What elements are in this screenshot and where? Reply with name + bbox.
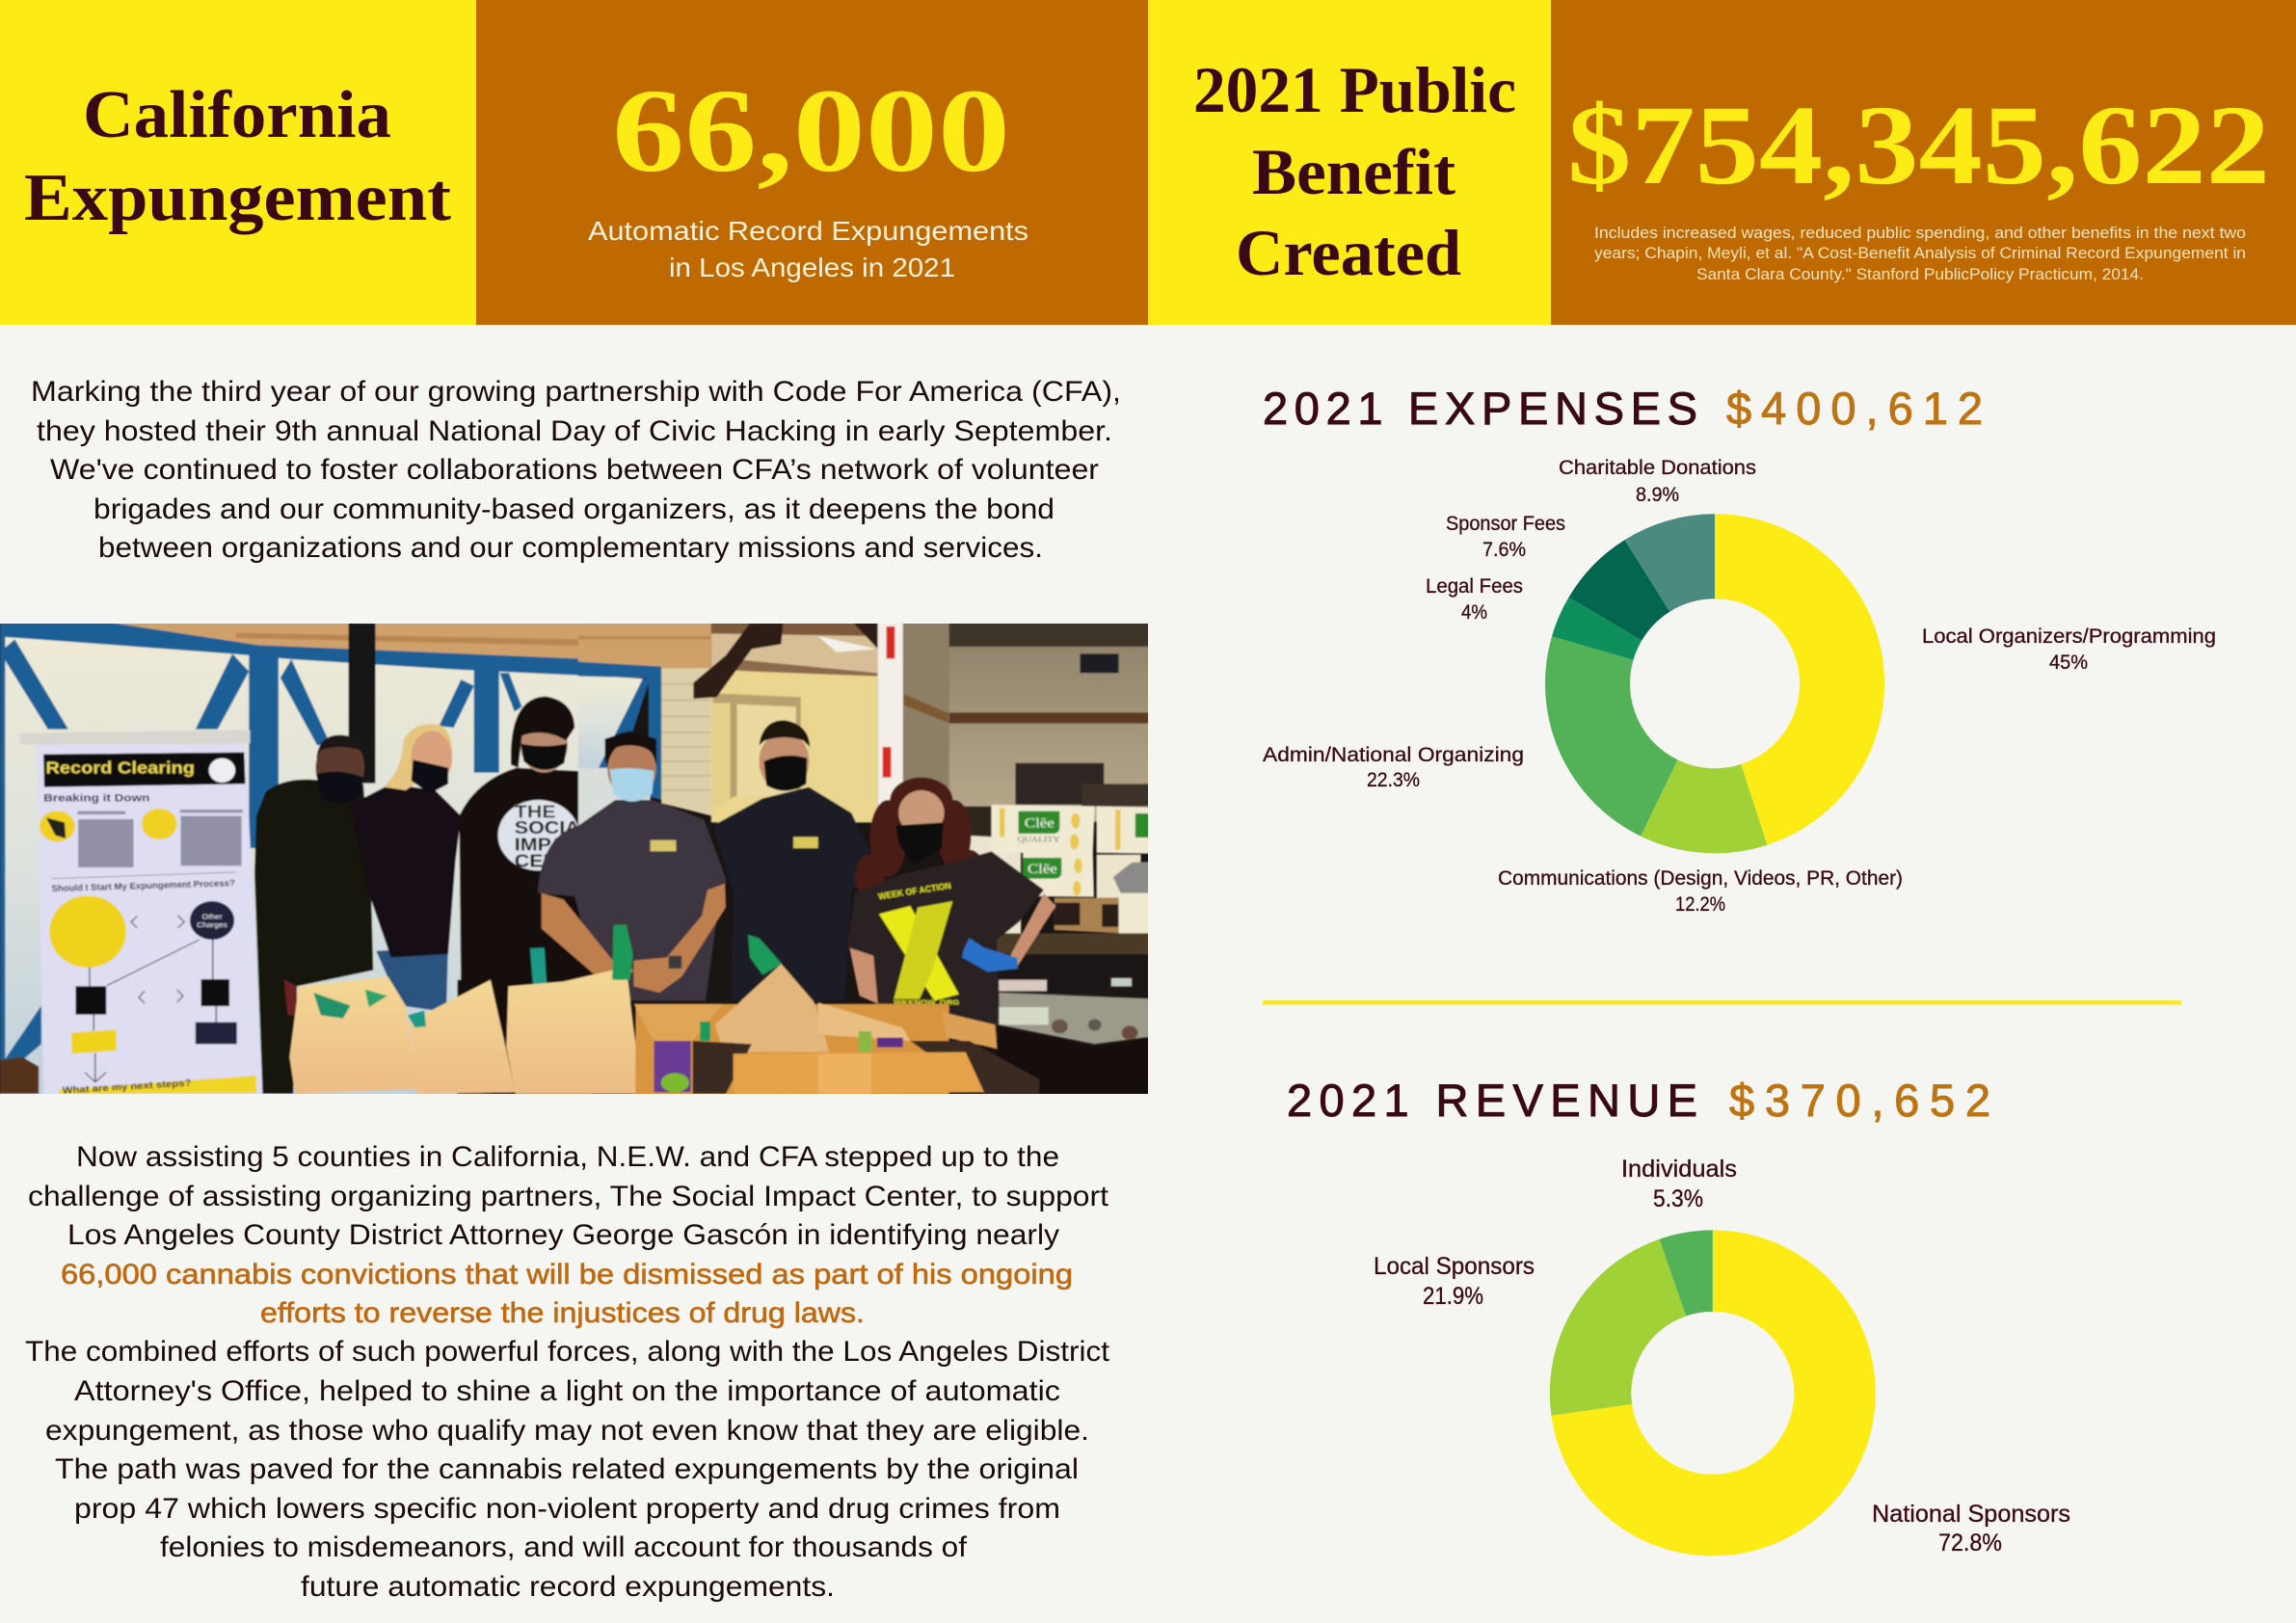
label: sponsor fees: Sponsor Fees bbox=[1446, 513, 1565, 535]
heading: expenses: 2021 EXPENSES bbox=[1263, 383, 1697, 434]
label: admin: Admin/National Organizing bbox=[1263, 744, 1524, 766]
lower paragraph: Los Angeles County District Attorney George Gascón in identifying nearly bbox=[67, 1219, 1059, 1251]
person 1 in black hoodie bbox=[254, 735, 373, 1094]
roll-up banner: Other bbox=[202, 913, 223, 920]
panel: California Expungement title bbox=[0, 0, 476, 325]
source note: Includes increased wages, reduced public spending, and other benefits in the next two bbox=[1594, 225, 2246, 242]
label: communications: Communications (Design, Videos, PR, Other) bbox=[1498, 867, 1903, 890]
lower paragraph: The path was paved for the cannabis related expungements by the original bbox=[55, 1453, 1079, 1485]
label: sponsor fees: 7.6% bbox=[1482, 539, 1526, 561]
roll-up banner: Charges bbox=[197, 920, 227, 929]
label: national sponsors: National Sponsors bbox=[1872, 1501, 2070, 1528]
heading: expenses bbox=[1263, 383, 1983, 434]
person 6 with yellow ribbon shirt: WKKNOW. ORG bbox=[894, 998, 959, 1007]
produce boxes: Clēe bbox=[1028, 862, 1057, 877]
label: local organizers: 45% bbox=[2049, 652, 2088, 674]
intro paragraph bbox=[31, 376, 1121, 564]
person 2 with blonde hair bbox=[351, 724, 461, 1012]
heading: revenue bbox=[1287, 1075, 1990, 1126]
intro paragraph: brigades and our community-based organizers, as it deepens the bond bbox=[93, 493, 1055, 525]
orange highlight text: 66,000 cannabis convictions that will be dismissed as part of his ongoing bbox=[61, 1259, 1073, 1290]
roll-up banner: What are my next steps? bbox=[62, 1078, 192, 1096]
lower paragraph: Attorney's Office, helped to shine a light on the importance of automatic bbox=[74, 1375, 1060, 1407]
lower paragraph: Now assisting 5 counties in California, N.E.W. and CFA stepped up to the bbox=[76, 1141, 1059, 1173]
label: legal fees: Legal Fees bbox=[1426, 575, 1523, 598]
lower paragraph: felonies to misdemeanors, and will account for thousands of bbox=[160, 1531, 968, 1563]
label: national sponsors bbox=[1872, 1501, 2070, 1556]
roll-up banner: Record Clearing bbox=[45, 758, 195, 778]
label: legal fees: 4% bbox=[1461, 601, 1487, 624]
stat caption bbox=[588, 216, 1028, 282]
title: Expungement bbox=[24, 161, 451, 235]
source note bbox=[1594, 225, 2246, 283]
produce boxes: QUALITY bbox=[1017, 836, 1060, 844]
orange highlight text: efforts to reverse the injustices of drug laws. bbox=[260, 1297, 865, 1329]
right half of photo bbox=[506, 623, 1170, 1099]
source note: years; Chapin, Meyli, et al. "A Cost-Benefit Analysis of Criminal Record Expungement in bbox=[1594, 245, 2246, 262]
panel: public benefit value stat bbox=[1551, 0, 2296, 325]
lower paragraph: challenge of assisting organizing partners, The Social Impact Center, to support bbox=[28, 1181, 1109, 1212]
roll-up banner: Should I Start My Expungement Process? bbox=[51, 879, 235, 894]
heading: 2021 Public bbox=[1193, 53, 1516, 126]
big number: 66,000 bbox=[612, 65, 1010, 197]
photo: volunteers standing with grocery bags bbox=[0, 617, 1170, 1099]
person 3 with social impact shirt: SOCIAL bbox=[515, 818, 593, 838]
label: local organizers: Local Organizers/Programming bbox=[1922, 625, 2216, 648]
produce boxes: Clēe bbox=[1025, 815, 1055, 831]
person 3 with social impact shirt: THE bbox=[515, 803, 556, 822]
person 5 in black polo bbox=[713, 720, 870, 1000]
stat caption: in Los Angeles in 2021 bbox=[669, 253, 955, 282]
roll-up banner: Breaking it Down bbox=[43, 791, 149, 804]
label: charitable donations bbox=[1559, 457, 1756, 506]
orange highlight text bbox=[61, 1259, 1073, 1329]
heading: expenses: $400,612 bbox=[1726, 383, 1983, 434]
person 3 with social impact shirt bbox=[458, 696, 596, 981]
intro paragraph: We've continued to foster collaborations between CFA’s network of volunteer bbox=[50, 454, 1099, 486]
label: local organizers bbox=[1922, 625, 2216, 674]
title bbox=[24, 78, 451, 235]
heading: Benefit bbox=[1252, 135, 1455, 208]
panel: 2021 Public Benefit Created heading bbox=[1148, 0, 1551, 325]
source note: Santa Clara County." Stanford PublicPolicy Practicum, 2014. bbox=[1696, 266, 2144, 283]
lower paragraph: expungement, as those who qualify may not even know that they are eligible. bbox=[45, 1415, 1089, 1447]
left half of photo bbox=[0, 617, 605, 1099]
big dollar value: $754,345,622 bbox=[1567, 82, 2270, 208]
person 6 with yellow ribbon shirt bbox=[847, 778, 1056, 1039]
lower paragraph: future automatic record expungements. bbox=[301, 1571, 835, 1603]
intro paragraph: Marking the third year of our growing partnership with Code For America (CFA), bbox=[31, 376, 1121, 408]
heading bbox=[1193, 53, 1516, 289]
label: national sponsors: 72.8% bbox=[1938, 1530, 2002, 1556]
panel: 2021 expenses bbox=[1263, 383, 2216, 916]
heading: revenue: $370,652 bbox=[1729, 1075, 1990, 1126]
label: legal fees bbox=[1426, 575, 1523, 624]
label: charitable donations: 8.9% bbox=[1636, 484, 1679, 506]
label: individuals: Individuals bbox=[1621, 1156, 1737, 1183]
label: charitable donations: Charitable Donations bbox=[1559, 457, 1756, 479]
intro paragraph: they hosted their 9th annual National Day of Civic Hacking in early September. bbox=[37, 415, 1112, 447]
label: admin: 22.3% bbox=[1367, 769, 1420, 791]
stat caption: Automatic Record Expungements bbox=[588, 216, 1028, 246]
roll-up banner bbox=[19, 730, 262, 1096]
label: individuals bbox=[1621, 1156, 1737, 1212]
person 3 with social impact shirt: CENTER bbox=[515, 852, 600, 871]
heading: Created bbox=[1236, 216, 1461, 289]
person 6 with yellow ribbon shirt: WEEK OF ACTION bbox=[877, 881, 952, 902]
label: individuals: 5.3% bbox=[1653, 1185, 1703, 1212]
panel: 66,000 expungements stat bbox=[476, 0, 1148, 325]
label: local sponsors: Local Sponsors bbox=[1374, 1253, 1535, 1280]
lower paragraph: The combined efforts of such powerful forces, along with the Los Angeles District bbox=[25, 1336, 1110, 1368]
title: California bbox=[83, 78, 391, 152]
grocery bags bbox=[289, 947, 590, 1096]
panel: 2021 revenue bbox=[1287, 1075, 2070, 1556]
donut chart: revenue bbox=[1550, 1230, 1876, 1556]
label: admin bbox=[1263, 744, 1524, 791]
lower paragraph: prop 47 which lowers specific non-violent property and drug crimes from bbox=[74, 1493, 1060, 1525]
label: local sponsors bbox=[1374, 1253, 1535, 1310]
donut chart: expenses bbox=[1545, 514, 1884, 853]
intro paragraph: between organizations and our complementary missions and services. bbox=[98, 532, 1043, 564]
person 4 in blue mask bbox=[538, 731, 727, 1000]
lower paragraph bbox=[25, 1141, 1110, 1603]
label: communications: 12.2% bbox=[1675, 893, 1725, 916]
bags and cardboard box bbox=[506, 924, 1039, 1097]
produce boxes bbox=[962, 805, 1168, 945]
person 3 with social impact shirt: IMPACT bbox=[515, 836, 593, 855]
label: local sponsors: 21.9% bbox=[1423, 1283, 1483, 1310]
label: communications bbox=[1498, 867, 1903, 916]
heading: revenue: 2021 REVENUE bbox=[1287, 1075, 1697, 1126]
label: sponsor fees bbox=[1446, 513, 1565, 561]
